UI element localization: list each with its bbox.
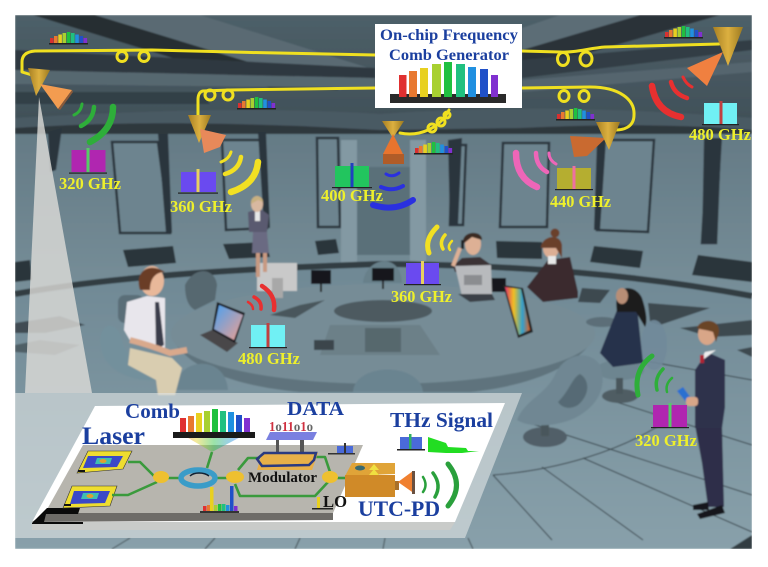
spectrum 440 GHz [555, 166, 593, 190]
rainbow display [503, 285, 533, 338]
THz radio waves [423, 464, 456, 506]
label 320 GHz right: 320 GHz [635, 431, 697, 450]
label: LO: LO [323, 492, 347, 511]
spectrum 320 GHz right [651, 403, 689, 428]
spectrum 480 GHz top [702, 101, 739, 125]
low frequency spectrum [200, 486, 239, 513]
spectrum 360 GHz center [404, 261, 441, 285]
microring resonator [181, 470, 215, 486]
wall base band [15, 264, 752, 296]
device diagram panel [15, 393, 522, 538]
antenna horn 440 GHz [570, 122, 620, 157]
person: seated woman [600, 288, 646, 367]
comb spectrum [173, 409, 255, 452]
THz spectrum and signal [397, 434, 479, 453]
waves 360 GHz center [428, 227, 452, 253]
person: woman on phone [527, 228, 578, 302]
label 480 GHz table: 480 GHz [238, 349, 300, 368]
mini comb 3 [414, 142, 453, 154]
comb generator box [375, 24, 522, 108]
waves 400 GHz [373, 173, 413, 208]
on-chip modulated spectrum [328, 443, 355, 454]
spectrum 320 GHz top [69, 148, 107, 174]
label 360 GHz top: 360 GHz [170, 197, 232, 216]
floor lines and dark tiles [15, 288, 752, 549]
laser chip 2 [63, 486, 117, 508]
UTC-PD block [345, 463, 395, 497]
waves 360 GHz top [221, 152, 258, 192]
couplers [153, 471, 338, 483]
wall [15, 133, 752, 298]
label 320 GHz top: 320 GHz [59, 174, 121, 193]
generator subtitle: Comb Generator [389, 47, 509, 64]
antenna horn 480 GHz [687, 27, 743, 86]
mini comb 2 [237, 97, 276, 110]
waveguides [112, 452, 346, 496]
antenna horn [395, 471, 415, 494]
floor [15, 322, 752, 549]
label 360 GHz center: 360 GHz [391, 287, 452, 306]
label: Modulator: Modulator [248, 470, 317, 486]
person: standing man [677, 321, 725, 519]
grey chip [45, 445, 363, 513]
label: Comb: Comb [125, 399, 180, 423]
person: man on phone with laptop [453, 233, 495, 302]
dark frame pillars [48, 128, 722, 243]
modulator [257, 453, 318, 470]
waves 320 GHz top [74, 104, 113, 142]
spectrum 360 GHz top [178, 169, 218, 194]
projection beam from horn to device diagram [25, 97, 92, 393]
person: standing woman [248, 196, 269, 277]
mini comb 5 [664, 26, 703, 38]
antenna horn 320 GHz [28, 68, 73, 110]
ceiling [15, 15, 752, 138]
chairs [100, 261, 667, 447]
waves 440 GHz [516, 153, 556, 187]
spectrum 400 GHz [332, 163, 372, 188]
label 400 GHz: 400 GHz [321, 186, 383, 205]
laser chip 1 [77, 451, 132, 473]
antenna horn 400 GHz [382, 121, 404, 164]
black steps [32, 508, 83, 524]
waves 480 GHz table [248, 286, 274, 310]
data stream: 1o11o1o [269, 420, 313, 435]
pillars [341, 140, 426, 265]
antenna horn 360 GHz [188, 115, 226, 153]
generator title: On-chip Frequency [380, 27, 518, 44]
LO line [312, 497, 333, 510]
conference table [184, 300, 585, 392]
spectrum 480 GHz table [249, 323, 287, 348]
white board [32, 403, 505, 522]
label: Laser: Laser [82, 421, 145, 450]
comb spectrum bars [390, 62, 506, 103]
waves 480 GHz top [652, 77, 692, 117]
label: DATA: DATA [287, 398, 345, 420]
fibre cables [22, 44, 719, 134]
label: UTC-PD: UTC-PD [358, 497, 440, 521]
label: THz Signal: THz Signal [390, 408, 493, 432]
person: seated man [124, 266, 187, 395]
wall vents [15, 239, 752, 282]
mini comb 4 [556, 108, 595, 120]
monitors on the table [257, 263, 506, 298]
label 480 GHz top: 480 GHz [689, 125, 751, 144]
wall recess panels [112, 138, 720, 243]
translucent panel surround [15, 393, 522, 538]
waves 320 GHz right [637, 356, 672, 395]
central wall recess [357, 167, 410, 255]
data stream [266, 420, 317, 463]
mini comb 1 [49, 32, 88, 44]
label 440 GHz: 440 GHz [550, 192, 611, 211]
tablet [200, 302, 245, 352]
